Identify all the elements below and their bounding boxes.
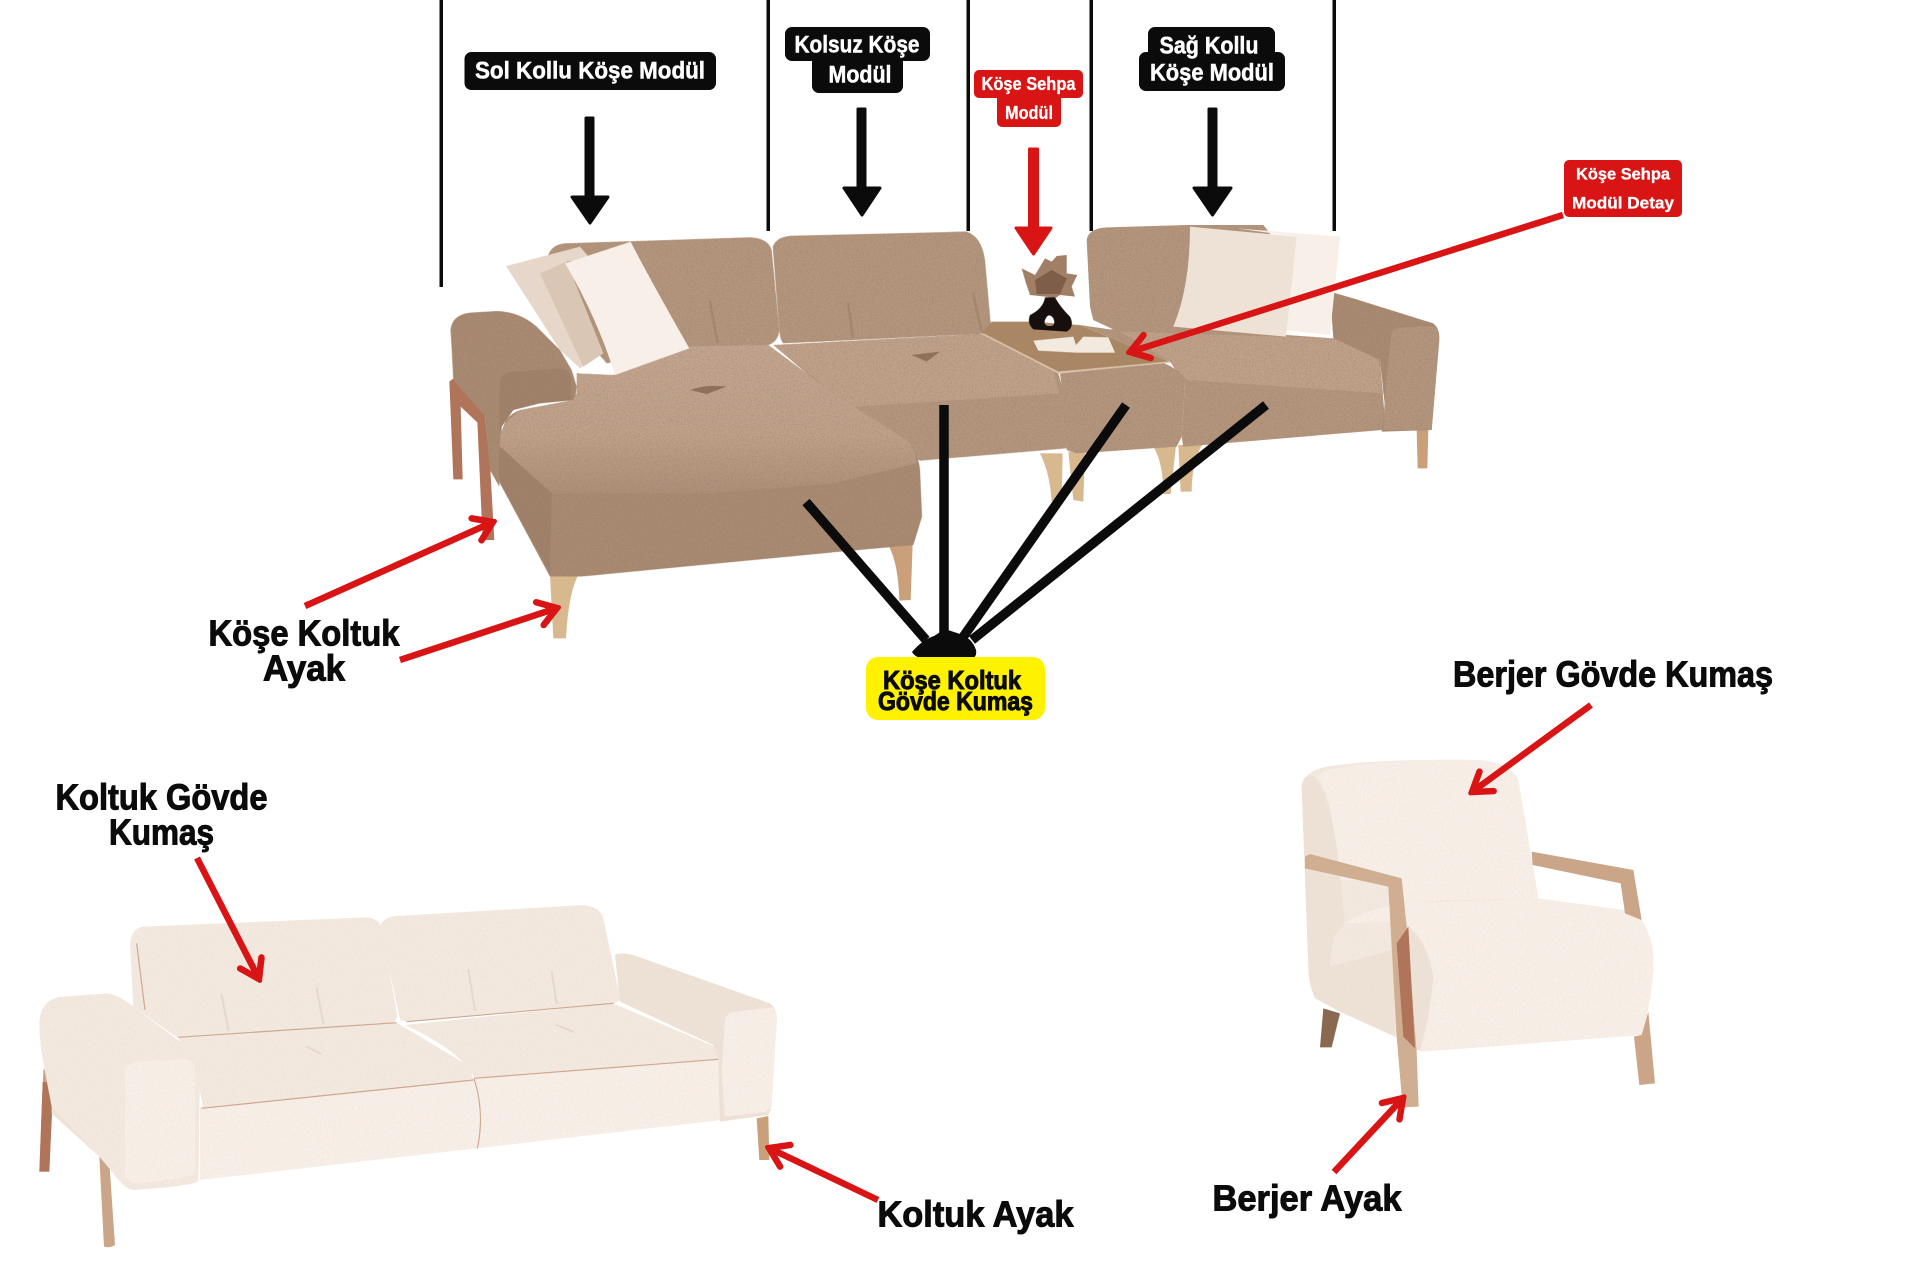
open book on table <box>1033 337 1115 353</box>
label: Sağ Kollu Köşe Modül <box>1139 27 1285 91</box>
label: Sol Kollu Köşe Modül <box>464 52 716 90</box>
vase with dried flowers <box>1022 255 1077 332</box>
illustration: cream armchair <box>1302 760 1655 1107</box>
heading: Köşe Koltuk Ayak: Köşe Koltuk <box>208 612 400 654</box>
label: Köşe Sehpa Modül: Modül <box>1005 103 1053 123</box>
divider: module boundaries <box>440 0 1336 287</box>
cushion pillows, chaise side <box>506 242 689 375</box>
arrow: Sol Kollu down <box>572 118 608 223</box>
arrow: sofa body fabric <box>197 858 259 979</box>
label: Kolsuz Köşe Modül <box>785 27 930 93</box>
fan of black leader lines <box>806 405 1266 662</box>
label: Sağ Kollu Köşe Modül: Sağ Kollu <box>1160 32 1258 60</box>
label: Köşe Sehpa Modül Detay: Köşe Sehpa <box>1576 164 1671 184</box>
sectional tufting details <box>690 293 982 394</box>
arrow: Kolsuz down <box>844 109 880 215</box>
arrow: armchair leg <box>1334 1098 1403 1172</box>
arrow: Sağ Kollu down <box>1194 109 1231 215</box>
label: Köşe Koltuk Gövde Kumaş: Gövde Kumaş <box>878 686 1033 716</box>
label: Sağ Kollu Köşe Modül: Köşe Modül <box>1150 60 1274 86</box>
arrow: Köşe Sehpa down <box>1016 149 1051 254</box>
label: Köşe Sehpa Modül: Köşe Sehpa <box>982 74 1076 94</box>
armchair rear leg <box>1320 1008 1340 1047</box>
armchair upholstery with fabric texture <box>1302 760 1654 1052</box>
arrow: armchair fabric <box>1472 705 1591 792</box>
arrow: to tray table <box>1130 215 1563 352</box>
label: Sol Kollu Köşe Modül: Sol Kollu Köşe Modül <box>475 58 705 84</box>
illustration: two-seater cream sofa <box>39 905 777 1247</box>
cushion pillows, right module <box>1173 227 1340 337</box>
heading: Koltuk Gövde Kumaş: Kumaş <box>109 812 214 852</box>
label: Köşe Koltuk Gövde Kumaş: Köşe Koltuk <box>883 665 1021 695</box>
armchair right wooden arm <box>1532 852 1642 920</box>
label: Kolsuz Köşe Modül: Kolsuz Köşe <box>794 32 920 58</box>
heading: Berjer Gövde Kumaş: Berjer Gövde Kumaş <box>1453 654 1773 694</box>
label: Köşe Sehpa Modül Detay: Modül Detay <box>1572 194 1675 212</box>
heading: Koltuk Gövde Kumaş: Koltuk Gövde <box>56 776 268 818</box>
armchair front right leg <box>1634 1012 1655 1085</box>
armchair left wooden arm and front leg <box>1305 854 1419 1107</box>
sectional upholstery with fabric texture <box>451 225 1439 577</box>
heading: Koltuk Gövde Kumaş <box>56 776 268 852</box>
label: Köşe Sehpa Modül <box>974 70 1083 127</box>
heading: Berjer Ayak: Berjer Ayak <box>1212 1178 1402 1218</box>
arrow: sofa leg <box>769 1148 878 1200</box>
sectional wooden legs, left <box>449 378 913 638</box>
arrow: corner sofa front leg <box>400 608 557 660</box>
label: Köşe Koltuk Gövde Kumaş <box>866 657 1045 720</box>
heading: Köşe Koltuk Ayak: Ayak <box>263 648 346 688</box>
label: Kolsuz Köşe Modül: Modül <box>828 62 892 88</box>
sectional wooden legs, right <box>1040 429 1428 502</box>
tray table module with wood top <box>982 322 1170 373</box>
sofa wooden frame and legs <box>39 1065 769 1247</box>
sofa upholstery with fabric texture <box>39 905 777 1190</box>
heading: Koltuk Ayak: Koltuk Ayak <box>878 1194 1074 1234</box>
illustration: sectional corner sofa <box>449 225 1439 638</box>
label: Köşe Sehpa Modül Detay <box>1564 160 1682 217</box>
arrow: corner sofa rear leg <box>305 522 493 606</box>
heading: Köşe Koltuk Ayak <box>208 612 400 688</box>
sofa seams and tufts <box>137 943 718 1148</box>
